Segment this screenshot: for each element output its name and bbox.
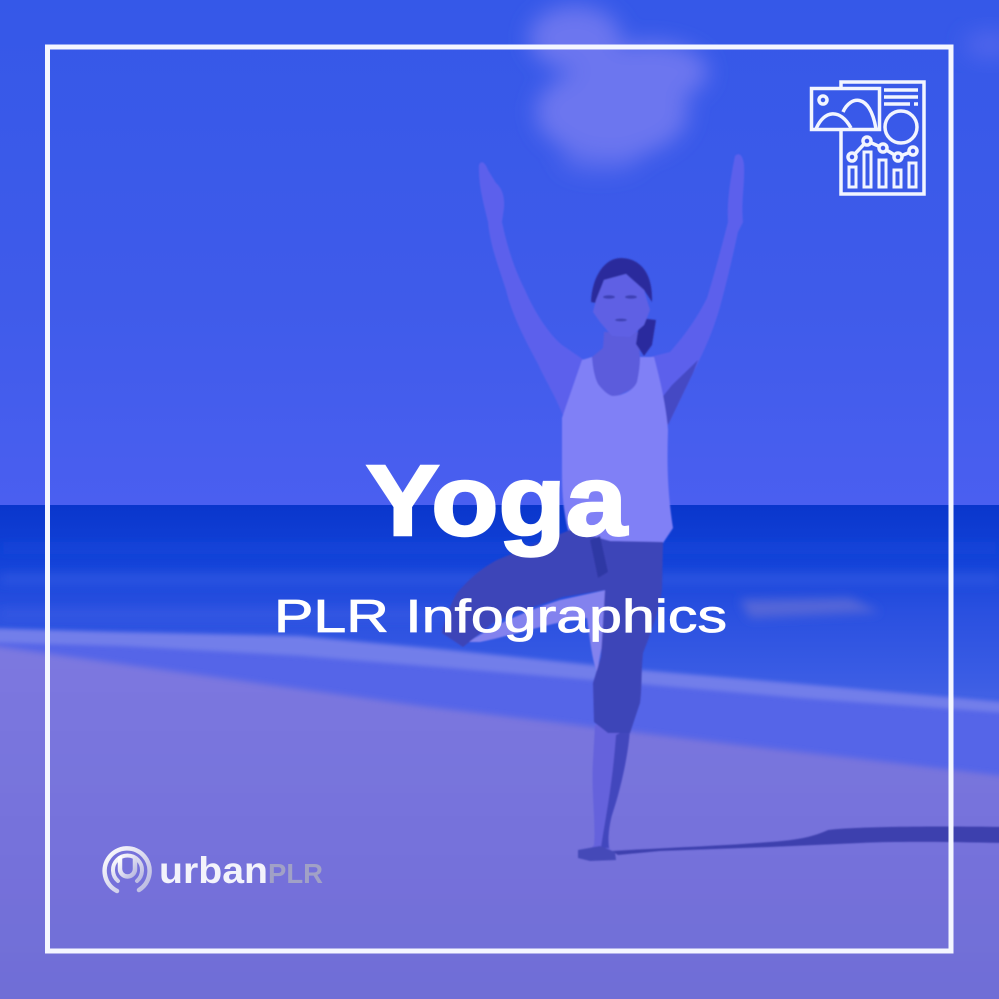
bent leg (468, 590, 606, 672)
wet sand (0, 632, 999, 790)
pie circle (885, 111, 917, 143)
shadow (612, 826, 999, 855)
bars (849, 152, 916, 187)
standing leg (582, 725, 630, 858)
title: Yoga (366, 445, 629, 557)
face (593, 274, 650, 337)
line chart (852, 141, 913, 157)
distant waves (0, 545, 999, 618)
logo mark (105, 848, 150, 891)
cloud (529, 6, 708, 174)
arm, raised left (479, 162, 584, 418)
picture sun (819, 96, 827, 104)
neck and chest (592, 332, 640, 398)
document outline (841, 82, 924, 194)
sky (0, 0, 999, 506)
small cloud (964, 31, 999, 59)
picture content (816, 100, 876, 129)
pants (442, 530, 663, 733)
arm shading (660, 360, 698, 425)
urbanPLR logo (105, 848, 323, 891)
pants folds (590, 536, 608, 578)
foam line (0, 628, 999, 714)
dry sand (0, 644, 999, 999)
shaded side of the standing leg (601, 728, 630, 848)
arm, raised right (650, 154, 744, 425)
sea (0, 505, 999, 725)
woman in tree pose (442, 154, 999, 861)
logo wordmark: urban (159, 850, 268, 891)
foot (578, 846, 616, 861)
chart points (848, 137, 917, 161)
ponytail (636, 318, 656, 356)
logo PLR: PLR (268, 858, 323, 889)
icon: report with image and charts (812, 82, 924, 194)
facial features (603, 295, 637, 321)
subtitle: PLR Infographics (274, 590, 727, 642)
text lines (884, 90, 918, 104)
picture frame (812, 88, 880, 130)
tank top (562, 357, 673, 543)
hair (591, 258, 652, 303)
